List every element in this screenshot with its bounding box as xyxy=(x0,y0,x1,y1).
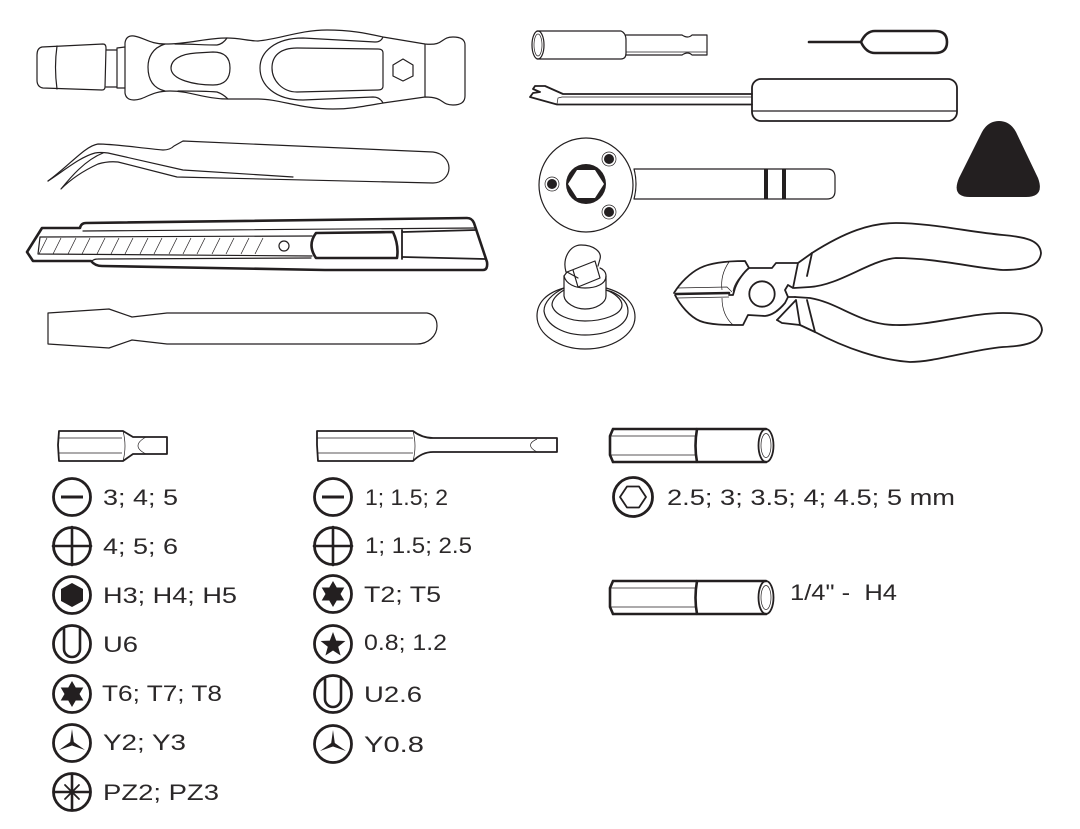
tool: utility knife xyxy=(27,218,487,270)
spec: torx T2 T5 xyxy=(314,576,441,612)
spec: pozidriv PZ2 PZ3: PZ2; PZ3 xyxy=(103,780,219,805)
spec: tri-wing Y2 Y3: Y2; Y3 xyxy=(103,730,186,755)
spec: U6: U6 xyxy=(103,632,138,657)
tool: curved tweezers xyxy=(48,141,449,189)
spec: socket sizes 2.5 to 5 mm: 2.5; 3; 3.5; 4; 4.5; 5 mm xyxy=(667,485,955,510)
tool: triangular opening pick xyxy=(957,121,1040,197)
spec: tri-wing Y2 Y3 xyxy=(54,724,186,762)
tool: precision screwdriver handle xyxy=(37,30,465,109)
spec: hex H3 H4 H5: H3; H4; H5 xyxy=(103,583,237,608)
tool: bit holder xyxy=(532,31,707,59)
spec: slotted 3 4 5 xyxy=(54,478,178,516)
tool: ratchet wrench xyxy=(539,138,835,232)
column 2: long slotted bit xyxy=(317,431,557,461)
column 3: hex socket bit xyxy=(610,429,774,462)
spec: quarter-inch H4: 1/4" - H4 xyxy=(790,580,897,605)
spec: pozidriv PZ2 PZ3 xyxy=(54,774,219,810)
spec: socket sizes 2.5 to 5 mm xyxy=(614,478,955,516)
spec: torx T6 T7 T8: T6; T7; T8 xyxy=(102,681,222,706)
spec: U2.6 xyxy=(314,676,422,712)
tool: flat spudger xyxy=(48,309,437,348)
spec: phillips 4 5 6: 4; 5; 6 xyxy=(103,534,178,559)
spec: tri-wing Y0.8: Y0.8 xyxy=(364,732,424,757)
spec: phillips 1 1.5 2.5 xyxy=(314,527,472,565)
tool: suction cup xyxy=(537,245,635,349)
spec: pentalobe 0.8 1.2: 0.8; 1.2 xyxy=(364,630,447,655)
column 3: quarter-inch adapter bit xyxy=(610,581,774,614)
spec: U6 xyxy=(54,626,138,662)
column 1: small slotted bit xyxy=(58,431,167,461)
spec: torx T6 T7 T8 xyxy=(54,676,222,712)
spec: slotted 1 1.5 2: 1; 1.5; 2 xyxy=(365,485,448,510)
spec: phillips 4 5 6 xyxy=(53,527,178,565)
tool: diagonal cutting pliers xyxy=(674,223,1042,362)
tool: SIM eject pin xyxy=(809,31,947,53)
spec: pentalobe 0.8 1.2 xyxy=(314,626,447,662)
spec: hex H3 H4 H5 xyxy=(54,576,237,614)
tool: pry tool with hooked tip xyxy=(530,79,957,121)
spec: U2.6: U2.6 xyxy=(364,682,422,707)
spec: tri-wing Y0.8 xyxy=(314,726,424,762)
spec: torx T2 T5: T2; T5 xyxy=(364,582,441,607)
spec: phillips 1 1.5 2.5: 1; 1.5; 2.5 xyxy=(365,533,472,558)
spec: slotted 1 1.5 2 xyxy=(314,478,448,516)
spec: slotted 3 4 5: 3; 4; 5 xyxy=(103,485,178,510)
